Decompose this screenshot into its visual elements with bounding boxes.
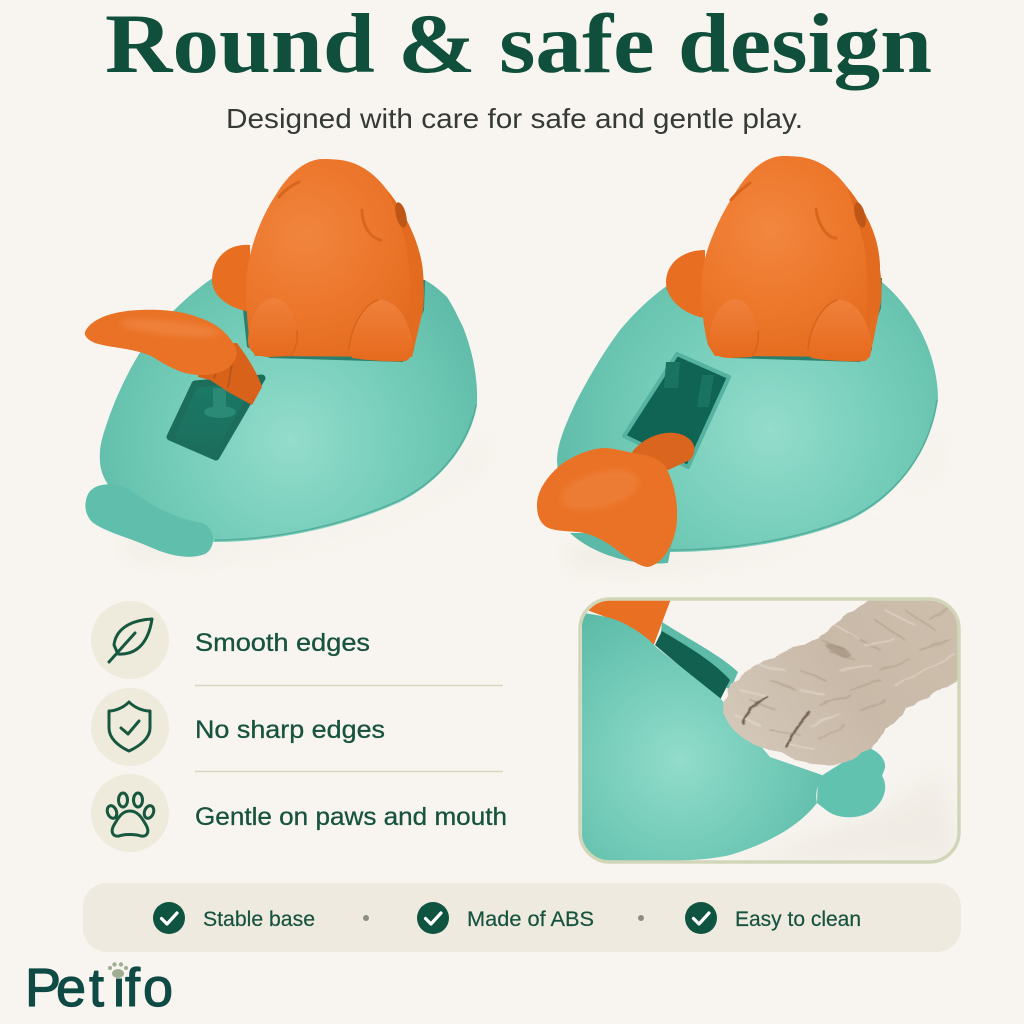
side bump bbox=[212, 245, 250, 312]
paw bbox=[723, 597, 965, 765]
label: No sharp edges bbox=[195, 716, 385, 744]
foot shading bbox=[290, 300, 378, 356]
panel border bbox=[580, 599, 959, 862]
product: toy with fin lowered bbox=[537, 156, 945, 568]
tail under fin bbox=[570, 532, 674, 564]
feature row: gentle on paws and mouth bbox=[91, 774, 507, 852]
mouth slot bbox=[852, 201, 868, 229]
body socket bbox=[666, 260, 882, 362]
teal base bbox=[100, 277, 477, 542]
fin blade bbox=[85, 310, 237, 375]
window posts bbox=[664, 362, 714, 407]
teal base bbox=[557, 282, 938, 552]
logo: Petifo bbox=[25, 958, 173, 1018]
body side strip bbox=[847, 187, 882, 332]
fin highlight bbox=[120, 316, 220, 340]
label: Gentle on paws and mouth bbox=[195, 803, 507, 831]
teal body bbox=[582, 613, 822, 861]
benefit: made of ABS: Made of ABS bbox=[467, 908, 594, 931]
benefit: made of ABS bbox=[417, 902, 594, 934]
mouth slot bbox=[393, 201, 409, 229]
dark window bbox=[655, 631, 730, 700]
dimples bbox=[279, 182, 381, 240]
fin stem bbox=[632, 433, 694, 470]
toy shadow bbox=[120, 420, 485, 557]
dimples bbox=[731, 183, 836, 238]
window bbox=[624, 354, 729, 467]
teal tail bbox=[85, 484, 213, 557]
base bottom rim bbox=[215, 405, 476, 540]
body socket bbox=[212, 260, 425, 362]
icon: shield bbox=[91, 688, 169, 766]
benefit: stable base: Stable base bbox=[203, 908, 315, 931]
orange body bbox=[246, 159, 424, 357]
fin blade bbox=[537, 448, 677, 567]
product: toy with fin raised bbox=[85, 159, 485, 557]
bottom benefits bar bbox=[83, 883, 961, 952]
icon: logo paw bbox=[108, 960, 128, 978]
orange fin piece bbox=[588, 600, 670, 645]
foot shading bbox=[751, 300, 837, 357]
benefit: easy to clean bbox=[685, 902, 861, 934]
toy shadow bbox=[570, 420, 945, 568]
fur strokes bbox=[735, 605, 955, 750]
paw toe creases bbox=[743, 697, 810, 747]
fin stem bbox=[198, 343, 262, 405]
feature row: smooth edges bbox=[91, 601, 370, 679]
benefit: easy to clean: Easy to clean bbox=[735, 908, 861, 931]
label: Smooth edges bbox=[195, 629, 370, 657]
window bbox=[170, 378, 262, 457]
feature row: no sharp edges bbox=[91, 688, 385, 766]
feet bbox=[709, 299, 758, 358]
window rim bbox=[660, 622, 738, 690]
shadow bbox=[813, 792, 949, 854]
icon: paw bbox=[91, 774, 169, 852]
teal tail bbox=[817, 747, 885, 817]
orange body bbox=[701, 156, 882, 357]
fin highlight bbox=[557, 462, 643, 518]
benefit: stable base bbox=[153, 902, 315, 934]
base bottom rim bbox=[670, 400, 937, 550]
feet bbox=[248, 298, 297, 357]
icon: leaf bbox=[91, 601, 169, 679]
body side strip bbox=[387, 190, 424, 332]
side bump bbox=[666, 250, 705, 318]
window post bbox=[204, 388, 236, 418]
subtitle: Designed with care for safe and gentle play. bbox=[226, 103, 803, 134]
inset photo panel: cat paw on toy bbox=[580, 596, 965, 862]
dark fur smudge bbox=[825, 644, 852, 658]
